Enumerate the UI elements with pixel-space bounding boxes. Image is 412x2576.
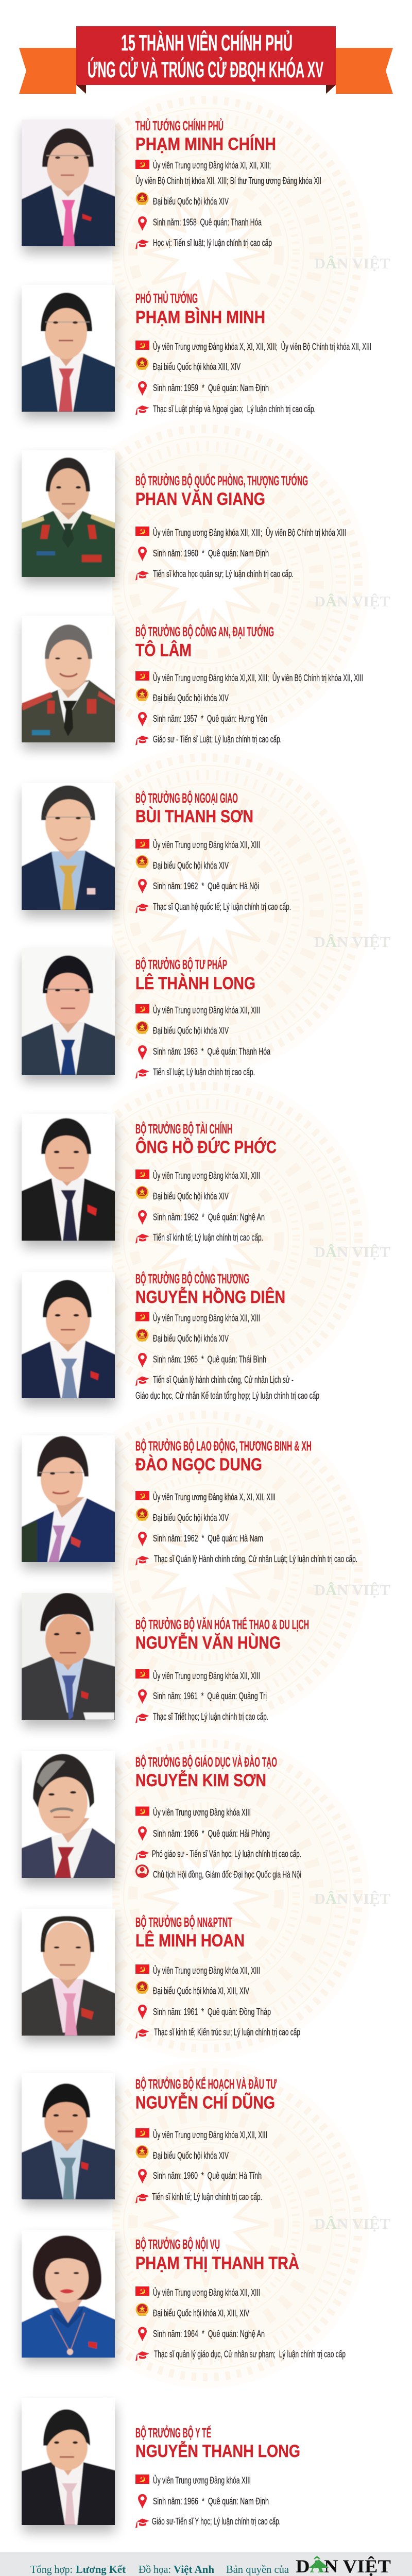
photo: Bùi Thanh Sơn: [22, 783, 115, 910]
panel: Đào Ngọc Dung: [19, 1433, 357, 1569]
watermarks: Dân Việt: DÂN VIỆT: [314, 2215, 390, 2232]
credit: designer name: Việt Anh: [174, 2563, 214, 2575]
watermarks: Dân Việt: DÂN VIỆT: [314, 934, 390, 951]
panel: Nguyễn Hồng Diên: [19, 1269, 319, 1406]
icon: location pin: [138, 1210, 147, 1225]
icon: graduation cap: [135, 2351, 149, 2361]
birth and hometown: Sinh năm: 1958 Quê quán: Thanh Hóa: [153, 217, 262, 228]
education: Tiến sĩ kinh tế; Lý luận chính trị cao cấp.: [152, 2192, 262, 2202]
icon: national emblem: [136, 1329, 148, 1342]
deputy: Đại biểu Quốc hội khóa XIV: [153, 860, 229, 871]
party roles: Ủy viên Trung ương Đảng khóa XIII: [153, 1807, 251, 1818]
icon: graduation cap: [135, 2518, 149, 2528]
photo: Phan Văn Giang: [22, 450, 115, 577]
icon: party flag: [135, 160, 149, 169]
education: Giáo sư-Tiến sĩ Y học; Lý luận chính trị cao cấp.: [152, 2516, 281, 2527]
birth and hometown: Sinh năm: 1962 * Quê quán: Nghệ An: [153, 1212, 265, 1223]
icon: party flag: [135, 1806, 149, 1816]
icon: graduation cap: [135, 736, 149, 745]
party roles: Ủy viên Trung ương Đảng khóa XII, XIII: [153, 1670, 260, 1681]
name: TÔ LÂM: [135, 640, 192, 660]
education: Tiến sĩ khoa học quân sự; Lý luận chính trị cao cấp.: [153, 569, 294, 579]
watermarks: Dân Việt: DÂN VIỆT: [314, 1244, 390, 1261]
watermarks: Dân Việt: DÂN VIỆT: [314, 1890, 390, 1907]
icon: location pin: [138, 1689, 147, 1704]
role: BỘ TRƯỞNG BỘ CÔNG AN, ĐẠI TƯỚNG: [135, 623, 274, 639]
birth and hometown: Sinh năm: 1964 * Quê quán: Nghệ An: [153, 2329, 265, 2339]
icon: graduation cap: [135, 1234, 149, 1244]
party roles: Ủy viên Trung ương Đảng khóa X, XI, XII, XIII: [153, 1492, 276, 1502]
title text: [88, 29, 323, 82]
party roles: Ủy viên Trung ương Đảng khóa XII, XIII: [153, 1170, 260, 1181]
party roles: Ủy viên Trung ương Đảng khóa XI, XII, XIII;: [153, 160, 271, 171]
position: Chủ tịch Hội đồng, Giám đốc Đại học Quốc gia Hà Nội: [153, 1869, 301, 1879]
name: PHẠM BÌNH MINH: [135, 308, 265, 327]
panel: Phạm Bình Minh: [19, 282, 371, 419]
background: drum pattern tiles: [112, 96, 363, 2381]
panel: Hồ Đức Phớc: [19, 1111, 277, 1248]
education: Tiến sĩ luật; Lý luận chính trị cao cấp.: [153, 1067, 255, 1077]
icon: location pin: [138, 2005, 147, 2019]
icon: party flag: [135, 2128, 149, 2138]
panel: Nguyễn Văn Hùng: [19, 1590, 309, 1727]
icon: party flag: [135, 527, 149, 536]
panel: Tô Lâm: [19, 613, 363, 750]
credit: copyright: Bản quyền của: [226, 2563, 289, 2575]
icon: location pin: [138, 2327, 147, 2341]
role: BỘ TRƯỞNG BỘ NGOẠI GIAO: [135, 790, 238, 806]
education: Học vị: Tiến sĩ luật; lý luận chính trị cao cấp: [153, 238, 272, 248]
name: NGUYỄN VĂN HÙNG: [135, 1633, 281, 1653]
party roles: Ủy viên Trung ương Đảng khóa XII, XIII: [153, 1005, 260, 1015]
role: BỘ TRƯỞNG BỘ NN&PTNT: [135, 1914, 232, 1930]
credit: graphics by: Đồ họa:: [139, 2563, 171, 2575]
icon: party flag: [135, 1491, 149, 1500]
photo: Lê Thành Long: [22, 948, 115, 1075]
panel: Phan Văn Giang: [19, 448, 346, 584]
icon: location pin: [138, 1353, 147, 1367]
party roles: Ủy viên Trung ương Đảng khóa XII, XIII: [153, 839, 260, 850]
party roles: Ủy viên Trung ương Đảng khóa XI,XII, XIII: [153, 2129, 267, 2140]
icon: graduation cap: [135, 2194, 149, 2203]
icon: location pin: [138, 2169, 147, 2183]
birth and hometown: Sinh năm: 1966 * Quê quán: Nam Định: [153, 2496, 269, 2506]
name: NGUYỄN THANH LONG: [135, 2442, 300, 2461]
photo: Nguyễn Chí Dũng: [22, 2073, 115, 2199]
role: BỘ TRƯỞNG BỘ TƯ PHÁP: [135, 956, 227, 972]
icon: national emblem: [136, 2145, 148, 2158]
icon: graduation cap: [135, 240, 149, 249]
education: Thạc sĩ Luật pháp và Ngoại giao; Lý luận chính trị cao cấp.: [153, 404, 316, 414]
name: NGUYỄN CHÍ DŨNG: [135, 2093, 275, 2113]
role: THỦ TƯỚNG CHÍNH PHỦ: [135, 117, 224, 133]
icon: national emblem: [136, 855, 148, 868]
deputy: Đại biểu Quốc hội khóa XIV: [153, 1513, 229, 1523]
panel: Lê Thành Long: [19, 945, 271, 1082]
icon: location pin: [138, 547, 147, 561]
name: NGUYỄN KIM SƠN: [135, 1771, 266, 1790]
education: Thạc sĩ Triết học; Lý luận chính trị cao cấp.: [153, 1711, 268, 1722]
birth and hometown: Sinh năm: 1960 * Quê quán: Nam Định: [153, 548, 269, 558]
name: PHẠM MINH CHÍNH: [135, 134, 276, 154]
party roles: Ủy viên Trung ương Đảng khóa XII, XIII: [153, 2287, 260, 2298]
icon: location pin: [138, 1045, 147, 1060]
icon: graduation cap: [135, 1714, 149, 1723]
role: PHÓ THỦ TƯỚNG: [135, 290, 198, 306]
watermarks: Dân Việt: DÂN VIỆT: [314, 255, 390, 272]
birth and hometown: Sinh năm: 1962 * Quê quán: Hà Nội: [153, 881, 259, 891]
birth and hometown: Sinh năm: 1957 * Quê quán: Hưng Yên: [153, 714, 267, 724]
icon: location pin: [138, 1532, 147, 1546]
photo: Phạm Bình Minh: [22, 285, 115, 412]
birth and hometown: Sinh năm: 1960 * Quê quán: Hà Tĩnh: [153, 2171, 262, 2181]
birth and hometown: Sinh năm: 1959 * Quê quán: Nam Định: [153, 383, 269, 393]
icon: party flag: [135, 1004, 149, 1013]
name: PHẠM THỊ THANH TRÀ: [135, 2253, 299, 2273]
party roles: Ủy viên Bộ Chính trị khóa XII, XIII; Bí thư Trung ương Đảng khóa XII: [135, 175, 321, 186]
icon: party flag: [135, 1170, 149, 1179]
deputy: Đại biểu Quốc hội khóa XIV: [153, 1333, 229, 1344]
name: ĐÀO NGỌC DUNG: [135, 1455, 262, 1475]
photo: Nguyễn Kim Sơn: [22, 1752, 115, 1878]
panel: Lê Minh Hoan: [19, 1906, 300, 2043]
photo: Đào Ngọc Dung: [22, 1435, 115, 1562]
education: Giáo sư - Tiến sĩ Luật; Lý luận chính trị cao cấp.: [153, 734, 282, 744]
icon: national emblem: [136, 192, 148, 205]
icon: location pin: [138, 712, 147, 726]
icon: graduation cap: [135, 2029, 149, 2039]
birth and hometown: Sinh năm: 1965 * Quê quán: Thái Bình: [153, 1354, 266, 1364]
icon: graduation cap: [135, 904, 149, 913]
deputy: Đại biểu Quốc hội khóa XI, XIII, XIV: [153, 2308, 249, 2318]
party roles: Ủy viên Trung ương Đảng khóa XIII: [153, 2475, 251, 2485]
photo: Lê Minh Hoan: [22, 1909, 115, 2036]
role: BỘ TRƯỞNG BỘ Y TẾ: [135, 2425, 211, 2441]
birth and hometown: Sinh năm: 1966 * Quê quán: Hải Phòng: [153, 1828, 270, 1839]
icon: national emblem: [136, 2303, 148, 2316]
photo: Phạm Minh Chính: [22, 120, 115, 246]
photo: Nguyễn Hồng Diên: [22, 1272, 115, 1398]
icon: national emblem: [136, 688, 148, 701]
icon: national emblem: [136, 1981, 148, 1994]
photo: Tô Lâm: [22, 616, 115, 742]
photo: Hồ Đức Phớc: [22, 1114, 115, 1241]
icon: location pin: [138, 879, 147, 893]
role: BỘ TRƯỞNG BỘ GIÁO DỤC VÀ ĐÀO TẠO: [135, 1754, 277, 1770]
photo: Nguyễn Văn Hùng: [22, 1593, 115, 1720]
birth and hometown: Sinh năm: 1962 * Quê quán: Hà Nam: [153, 1533, 263, 1544]
title banner: [19, 26, 393, 94]
name: NGUYỄN HỒNG DIÊN: [135, 1287, 285, 1307]
icon: national emblem: [136, 1021, 148, 1034]
birth and hometown: Sinh năm: 1963 * Quê quán: Thanh Hóa: [153, 1046, 271, 1057]
education: Thạc sĩ kinh tế; Kiến trúc sư; Lý luận chính trị cao cấp: [154, 2027, 300, 2038]
icon: location pin: [138, 1826, 147, 1841]
deputy: Đại biểu Quốc hội khóa XIV: [153, 1191, 229, 1201]
name: BÙI THANH SƠN: [135, 807, 253, 826]
party roles: Ủy viên Trung ương Đảng khóa XII, XIII: [153, 1965, 260, 1976]
role: BỘ TRƯỞNG BỘ CÔNG THƯƠNG: [135, 1270, 249, 1286]
panel: Nguyễn Chí Dũng: [19, 2071, 277, 2207]
photo: Nguyễn Thanh Long: [22, 2399, 115, 2525]
logo: Dân Việt: DÂN VIỆT: [296, 2556, 391, 2576]
credit: compiled by: Tổng hợp:: [30, 2563, 73, 2575]
photo: Phạm Thị Thanh Trà: [22, 2230, 115, 2358]
icon: national emblem: [136, 357, 148, 370]
panel: Phạm Thị Thanh Trà: [19, 2228, 346, 2364]
icon: location pin: [138, 2494, 147, 2509]
name: ÔNG HỒ ĐỨC PHỚC: [135, 1137, 277, 1157]
watermarks: Dân Việt: DÂN VIỆT: [314, 1582, 390, 1599]
party roles: [135, 160, 321, 186]
deputy: Đại biểu Quốc hội khóa XIV: [153, 2150, 229, 2161]
credit: compiler name: Lương Kết: [76, 2563, 126, 2575]
panel: Nguyễn Thanh Long: [19, 2396, 300, 2532]
education: [135, 1375, 319, 1401]
icon: party flag: [135, 671, 149, 681]
icon: party flag: [135, 341, 149, 350]
panel: Phạm Minh Chính: [19, 117, 321, 253]
panel: Bùi Thanh Sơn: [19, 781, 291, 917]
icon: party flag: [135, 839, 149, 849]
icon: party flag: [135, 1964, 149, 1974]
icon: graduation cap: [135, 405, 149, 415]
footer: [0, 2552, 412, 2576]
birth and hometown: Sinh năm: 1961 * Quê quán: Đồng Tháp: [153, 2007, 271, 2017]
education: Phó giáo sư - Tiến sĩ Văn học; Lý luận chính trị cao cấp.: [152, 1849, 301, 1859]
name: LÊ THÀNH LONG: [135, 974, 255, 993]
education: Thạc sĩ Quan hệ quốc tế; Lý luận chính trị cao cấp.: [153, 902, 291, 912]
education: Giáo dục học, Cử nhân Kế toán tổng hợp; Lý luận chính trị cao cấp: [135, 1391, 319, 1401]
icon: person badge: [135, 1865, 149, 1878]
icon: graduation cap: [135, 1556, 149, 1565]
birth and hometown: Sinh năm: 1961 * Quê quán: Quảng Trị: [153, 1691, 267, 1701]
panel: Nguyễn Kim Sơn: [19, 1749, 301, 1885]
icon: national emblem: [136, 1508, 148, 1521]
education: Tiến sĩ kinh tế; Lý luận chính trị cao cấp.: [153, 1232, 263, 1243]
name: PHAN VĂN GIANG: [135, 489, 265, 509]
deputy: Đại biểu Quốc hội khóa XI, XIII, XIV: [153, 1986, 249, 1996]
icon: party flag: [135, 1312, 149, 1321]
education: Tiến sĩ Quản lý hành chính công, Cử nhân Lịch sử -: [153, 1375, 294, 1385]
icon: party flag: [135, 2286, 149, 2296]
watermarks: Dân Việt: [314, 255, 390, 2232]
role: BỘ TRƯỞNG BỘ TÀI CHÍNH: [135, 1121, 232, 1137]
deputy: Đại biểu Quốc hội khóa XIV: [153, 196, 229, 207]
icon: graduation cap: [135, 1377, 149, 1386]
deputy: Đại biểu Quốc hội khóa XIV: [153, 693, 229, 703]
role: BỘ TRƯỞNG BỘ KẾ HOẠCH VÀ ĐẦU TƯ: [135, 2076, 277, 2092]
party roles: Ủy viên Trung ương Đảng khóa XII, XIII: [153, 1313, 260, 1323]
icon: location pin: [138, 381, 147, 396]
icon: graduation cap: [135, 571, 149, 580]
role: BỘ TRƯỞNG BỘ NỘI VỤ: [135, 2236, 220, 2252]
deputy: Đại biểu Quốc hội khóa XIII, XIV: [153, 362, 241, 372]
watermarks: Dân Việt: DÂN VIỆT: [314, 593, 390, 610]
icon: graduation cap: [135, 1851, 149, 1860]
name: LÊ MINH HOAN: [135, 1931, 245, 1951]
deputy: Đại biểu Quốc hội khóa XIV: [153, 1025, 229, 1036]
icon: party flag: [135, 1669, 149, 1679]
icon: location pin: [138, 216, 147, 231]
icon: graduation cap: [135, 1069, 149, 1079]
icon: national emblem: [136, 1186, 148, 1199]
icon: party flag: [135, 2475, 149, 2484]
